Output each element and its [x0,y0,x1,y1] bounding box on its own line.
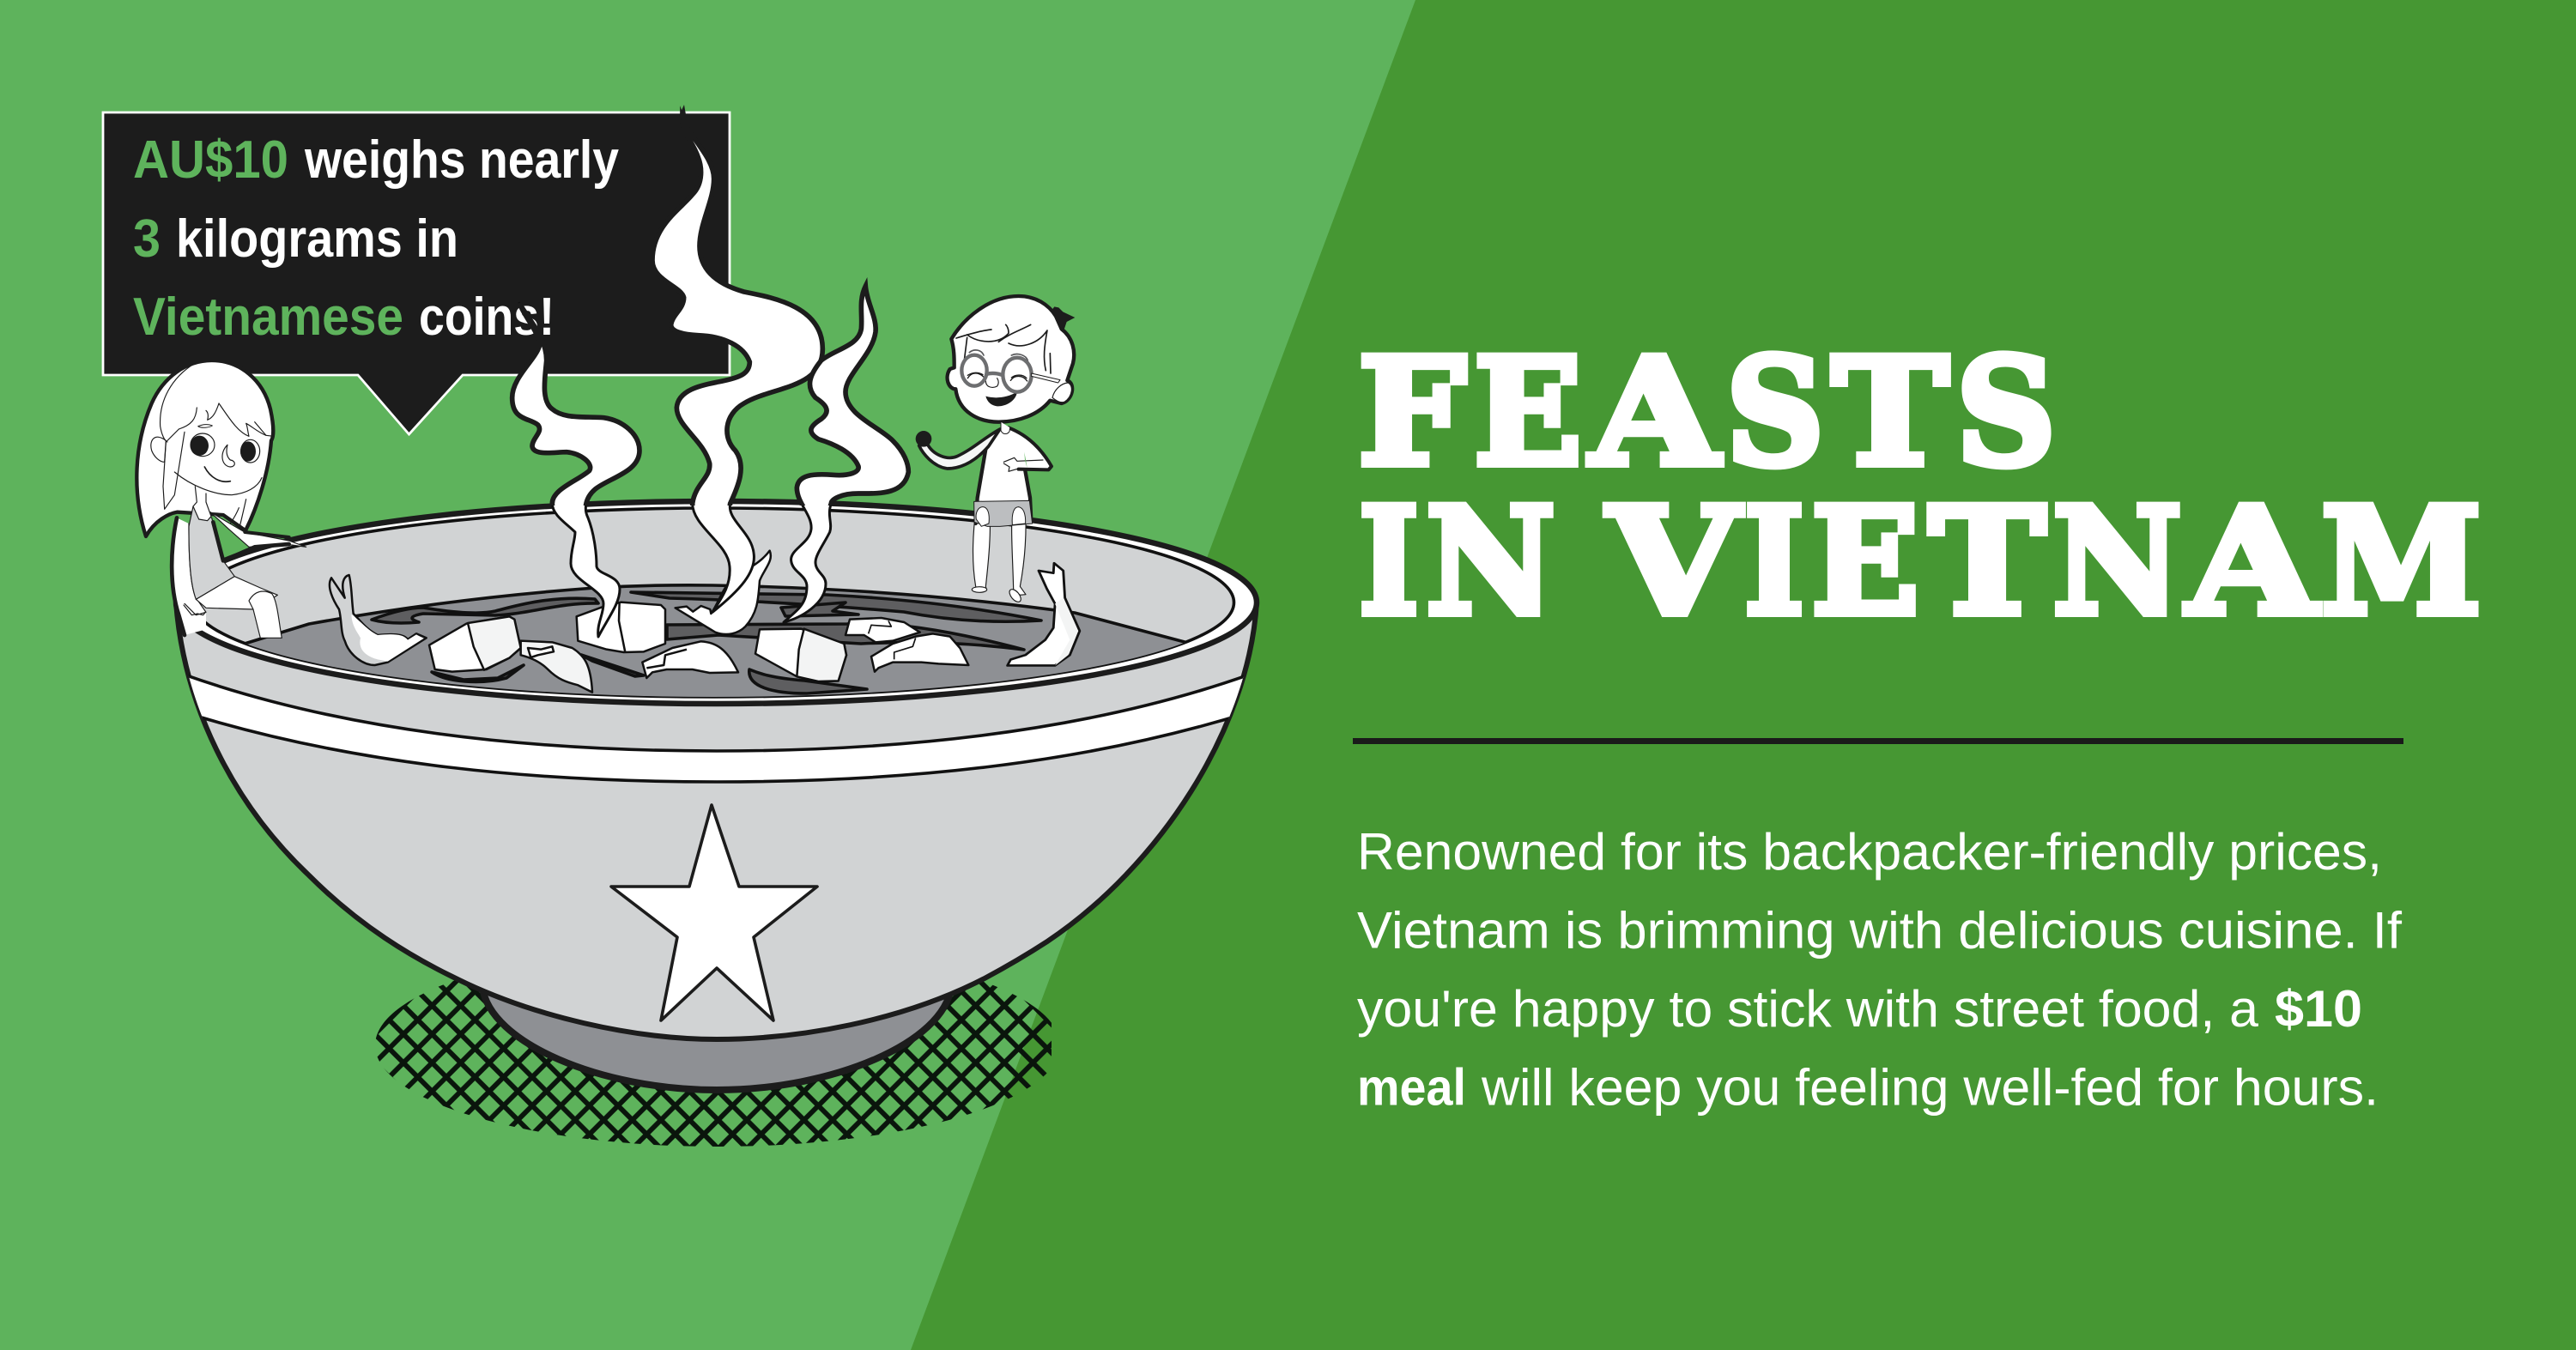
soup streaks [372,592,1041,693]
girl skirt [196,577,277,609]
title second line: A [2185,474,2319,649]
herb leaf C [846,618,920,642]
soup surface [245,584,1186,697]
body paragraph: Renowned for its backpacker-friendly prices, [1357,823,2382,881]
girl ear [151,437,166,462]
steam wisp: centre [652,118,822,612]
steam centre, lower line [652,118,822,612]
boy neck [1001,422,1010,434]
callout text: AU$10 [133,130,288,190]
character: girl sitting on the rim [136,360,306,638]
steam wisp: right [784,286,908,622]
title second line: N [2052,474,2182,649]
boy torso [976,427,1030,504]
girl mouth [204,467,230,481]
boy raised hand [916,431,931,447]
herb leaf D [871,633,968,672]
character: boy standing on the rim [916,296,1075,604]
white stripe on bowl [163,667,1270,782]
tofu cube right [755,629,846,681]
boy green gap [1024,452,1027,468]
callout text: weighs nearly [304,130,619,190]
girl left arm [172,518,206,635]
girl eyebrow [198,425,212,427]
steam heavy outlines above rim [510,106,912,505]
girl hair lines [161,363,273,526]
tofu cube left [429,616,521,672]
title: S [1726,324,1824,499]
callout text: Vietnamese [133,288,403,347]
boy hair lines [956,324,1051,373]
steam tip centre [679,105,687,120]
body paragraph: will keep you feeling well-fed for hours. [1481,1059,2379,1116]
boy legs [973,507,990,590]
callout text: 3 [133,209,161,269]
divider rule [1353,738,2403,744]
background: light green diagonal panel [0,0,1415,1350]
soup items left [330,575,665,693]
callout text: kilograms in [176,209,458,269]
girl eyes [191,433,215,457]
boy head [948,296,1074,422]
illustration: soup bowl [163,501,1270,1090]
title second line: I [1359,474,1419,649]
boy closed eyes [967,372,1027,381]
girl leg [249,591,282,638]
prawn centre [676,551,771,634]
steam wisp: left [512,303,639,637]
title second line: N [1426,474,1555,649]
body paragraph: Vietnam is brimming with delicious cuisine. If [1357,901,2402,960]
body paragraph: meal [1357,1059,1466,1116]
girl hand [184,605,205,615]
boy nose [985,378,998,387]
steam right, lower line [784,286,908,622]
title: S [1956,324,2056,499]
callout speech bubble [103,112,730,434]
title second line: E [1811,474,1919,649]
herb leaf B [642,641,738,678]
prawn right [1008,563,1080,665]
girl hair [136,360,273,536]
girl dress [189,506,234,599]
boy raised arm [919,429,1000,469]
boy ear [1052,383,1071,403]
girl gap [218,530,246,554]
callout box [103,112,730,434]
herb leaf A [521,641,592,693]
tofu cube centre-left [577,602,665,652]
bowl star [611,805,817,1020]
title second line: M [2321,474,2482,649]
girl face [166,403,264,495]
girl collar and neck [193,487,211,521]
prawn left [330,575,427,665]
boy glasses temple [1032,373,1060,383]
title: F [1358,324,1466,499]
hatched shadow under the bowl [376,980,1052,1147]
title second line: I [1744,474,1804,649]
title second line: V [1606,474,1742,649]
callout text [133,130,619,347]
boy hair tuft [1052,306,1075,330]
girl nose [222,445,234,467]
boy mouth [985,392,1017,406]
body paragraph: you're happy to stick with street food, a [1357,980,2259,1038]
title: T [1832,324,1949,499]
body paragraph: $10 [2275,980,2362,1038]
steam left, lower line [512,303,639,637]
bowl rim outer [176,501,1257,704]
girl right arm [210,512,306,547]
boy eyebrows [969,350,1027,360]
boy other arm [1003,427,1052,470]
boy glasses [961,355,1032,392]
body paragraph [1357,823,2402,1116]
bowl body [176,602,1257,1039]
title: A [1589,324,1721,499]
title second line: T [1929,474,2046,649]
title: E [1474,324,1582,499]
boy feet [972,587,987,592]
bowl foot [482,987,951,1090]
callout text: coins! [419,288,555,347]
soup items right [642,551,968,681]
bowl rim inner [194,508,1234,697]
boy shorts [974,500,1033,526]
